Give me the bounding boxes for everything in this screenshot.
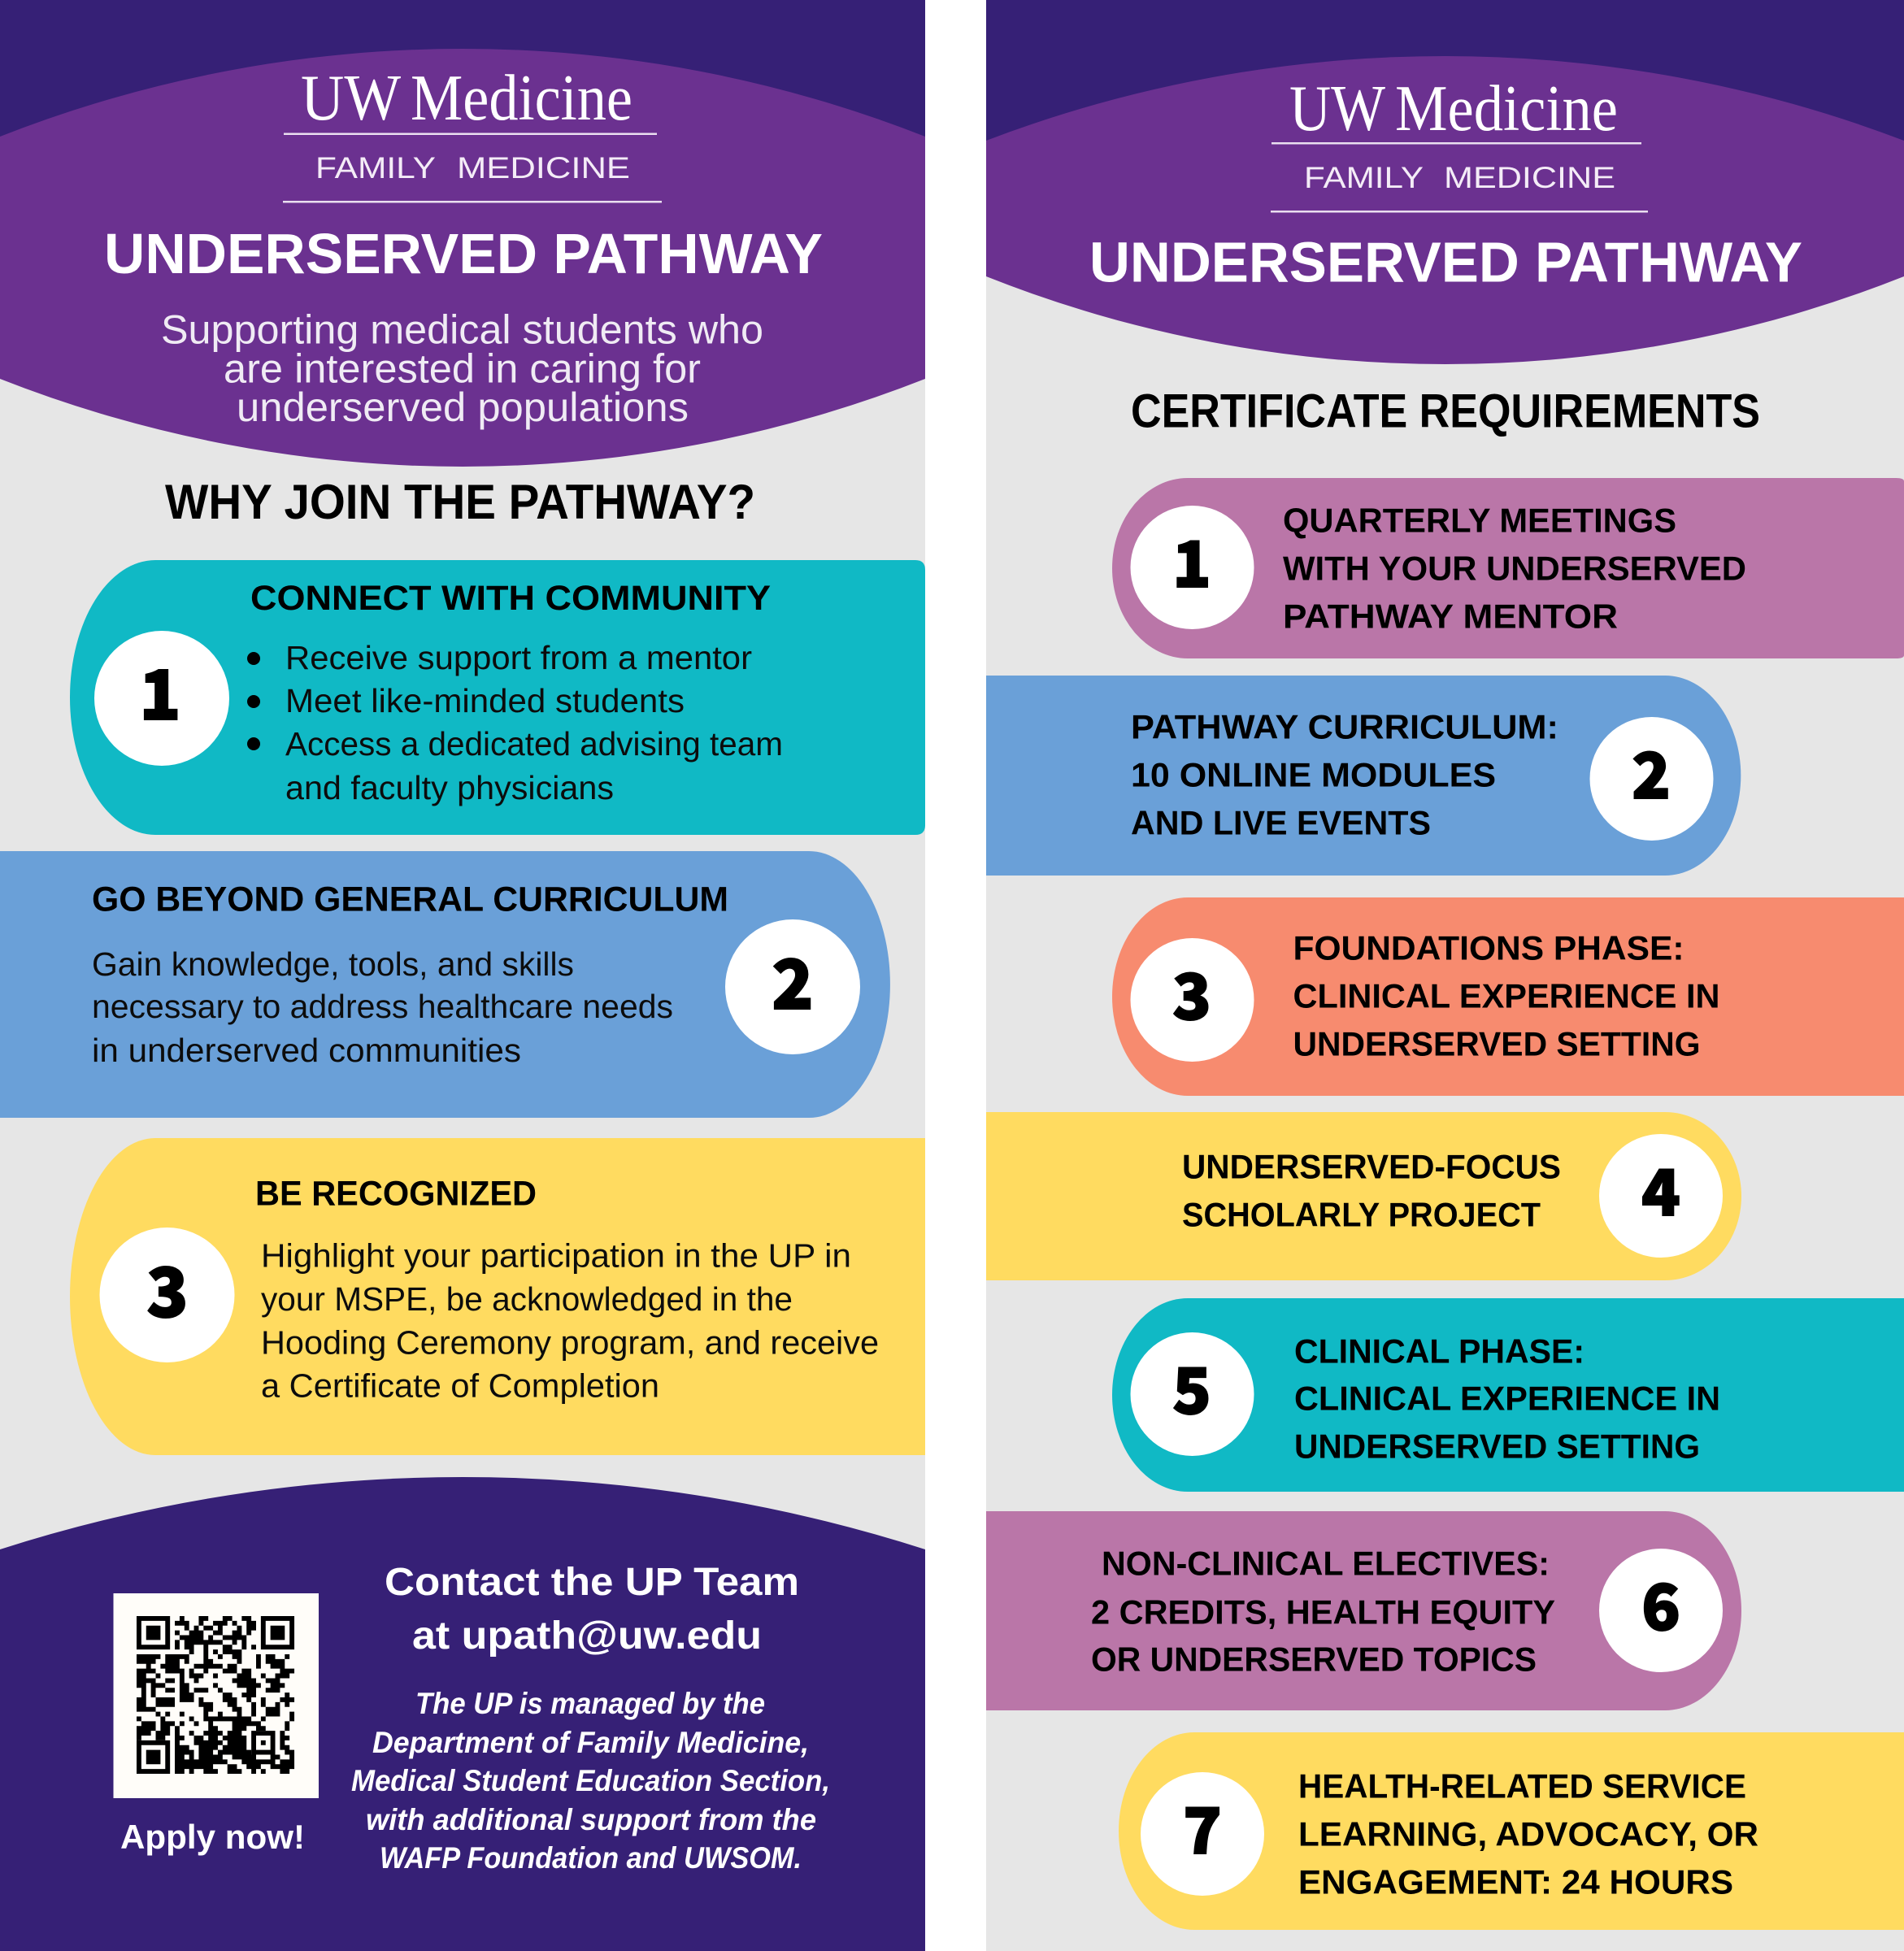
subtitle: Supporting medical students who [161, 307, 763, 353]
heading: CERTIFICATE REQUIREMENTS [1131, 385, 1760, 437]
requirement 6 [986, 1511, 1741, 1710]
requirement 6: OR UNDERSERVED TOPICS [1091, 1640, 1537, 1678]
requirement 6: 2 CREDITS, HEALTH EQUITY [1091, 1593, 1555, 1631]
card 2: go beyond general curriculum [0, 851, 890, 1118]
header shape [0, 49, 925, 467]
requirement 1: 1 [1172, 515, 1211, 606]
card 2: go beyond general curriculum: Gain knowledge, tools, and skills [92, 945, 574, 983]
card 2: go beyond general curriculum: 2 [772, 931, 814, 1029]
requirement 4 [986, 1112, 1741, 1280]
managed by note: with additional support from the [366, 1803, 816, 1836]
heading: WHY JOIN THE PATHWAY? [165, 475, 755, 529]
requirement 5: UNDERSERVED SETTING [1294, 1427, 1700, 1465]
managed by note: Medical Student Education Section, [351, 1764, 830, 1797]
requirement 3: UNDERSERVED SETTING [1293, 1024, 1701, 1063]
card 2: go beyond general curriculum: necessary to address healthcare needs [92, 988, 673, 1025]
card 3: be recognized: BE RECOGNIZED [255, 1174, 537, 1213]
managed by note: The UP is managed by the [415, 1687, 765, 1720]
apply now: Apply now! [120, 1818, 305, 1856]
card 2: go beyond general curriculum: GO BEYOND GENERAL CURRICULUM [92, 880, 728, 919]
requirement 2: 2 [1632, 726, 1671, 817]
requirement 5: CLINICAL EXPERIENCE IN [1294, 1379, 1720, 1418]
qr code [114, 1593, 319, 1798]
requirement 3: 3 [1172, 947, 1211, 1038]
managed by note [351, 1687, 830, 1875]
subtitle: are interested in caring for [224, 346, 701, 392]
header shape [986, 56, 1904, 364]
requirement 3 [1112, 897, 1904, 1096]
logo [1271, 73, 1648, 213]
requirement 6: NON-CLINICAL ELECTIVES: [1102, 1545, 1550, 1582]
contact [385, 1561, 799, 1658]
requirement 7: LEARNING, ADVOCACY, OR [1298, 1814, 1758, 1853]
managed by note: Department of Family Medicine, [372, 1726, 809, 1759]
panel: why join the pathway [0, 0, 925, 1951]
requirement 1: WITH YOUR UNDERSERVED [1283, 550, 1746, 587]
requirement 2: PATHWAY CURRICULUM: [1131, 707, 1558, 746]
footer [0, 1477, 925, 1951]
logo: Medicine [411, 63, 632, 134]
requirement 4: SCHOLARLY PROJECT [1182, 1195, 1541, 1234]
requirement 5: CLINICAL PHASE: [1294, 1332, 1584, 1371]
contact: Contact the UP Team [385, 1561, 799, 1604]
requirement 1 [1112, 478, 1904, 658]
card 3: be recognized: a Certificate of Completion [261, 1367, 659, 1405]
requirement 7: 7 [1183, 1781, 1222, 1872]
requirement 7: HEALTH-RELATED SERVICE [1298, 1767, 1746, 1805]
requirement 7: ENGAGEMENT: 24 HOURS [1298, 1863, 1733, 1901]
card 1: connect with community: Receive support from a mentor [285, 639, 752, 676]
card 3: be recognized: Highlight your participation in the UP in [261, 1237, 851, 1275]
requirement 7 [1119, 1732, 1904, 1930]
logo: UW [1289, 73, 1385, 145]
title: UNDERSERVED PATHWAY [1089, 231, 1802, 294]
logo: UW [301, 63, 401, 134]
requirement 6: 6 [1641, 1558, 1680, 1649]
card 1: connect with community [70, 560, 925, 835]
contact: at upath@uw.edu [412, 1614, 762, 1658]
subtitle [161, 307, 763, 430]
logo [283, 63, 662, 203]
card 3: be recognized [70, 1138, 925, 1455]
requirement 1: QUARTERLY MEETINGS [1283, 501, 1676, 540]
logo: MEDICINE [1444, 161, 1615, 194]
requirement 2 [986, 676, 1741, 876]
card 1: connect with community: CONNECT WITH COMMUNITY [250, 579, 771, 618]
card 3: be recognized: your MSPE, be acknowledged in the [261, 1280, 793, 1318]
subtitle: underserved populations [237, 385, 689, 430]
panel: certificate requirements [986, 0, 1904, 1951]
title: UNDERSERVED PATHWAY [104, 222, 823, 285]
card 1: connect with community: Access a dedicated advising team [285, 725, 783, 763]
managed by note: WAFP Foundation and UWSOM. [380, 1841, 802, 1875]
requirement 4: UNDERSERVED-FOCUS [1182, 1148, 1561, 1185]
logo: MEDICINE [457, 151, 630, 185]
requirement 5: 5 [1172, 1341, 1211, 1432]
logo: FAMILY [315, 151, 436, 185]
requirement 3: FOUNDATIONS PHASE: [1293, 928, 1684, 967]
requirement 2: AND LIVE EVENTS [1131, 803, 1431, 842]
card 1: connect with community: 1 [139, 641, 181, 740]
card 1: connect with community: Meet like-minded students [285, 682, 685, 719]
requirement 5 [1112, 1298, 1904, 1492]
card 1: connect with community: and faculty physicians [285, 769, 614, 806]
logo: Medicine [1395, 73, 1618, 145]
logo: FAMILY [1304, 161, 1424, 194]
requirement 1: PATHWAY MENTOR [1283, 597, 1618, 636]
card 3: be recognized: Hooding Ceremony program, and receive [261, 1323, 879, 1361]
card 2: go beyond general curriculum: in underserved communities [92, 1032, 521, 1069]
requirement 2: 10 ONLINE MODULES [1131, 756, 1496, 793]
requirement 3: CLINICAL EXPERIENCE IN [1293, 977, 1720, 1015]
requirement 4: 4 [1641, 1143, 1680, 1234]
card 3: be recognized: 3 [146, 1239, 189, 1337]
